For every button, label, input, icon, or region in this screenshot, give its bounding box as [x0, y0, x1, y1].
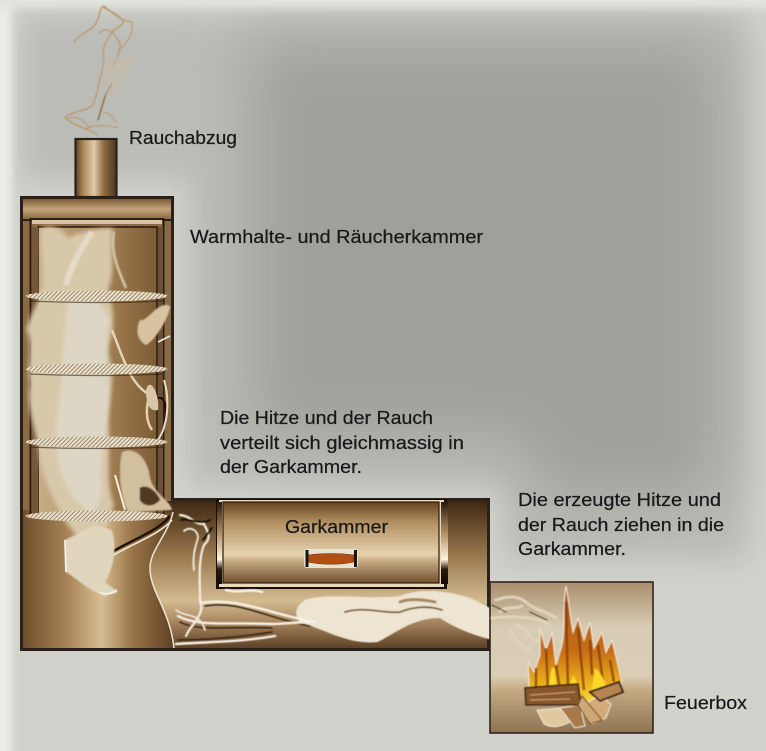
text: heat and smoke distribution: [220, 407, 464, 477]
door handle: [304, 549, 358, 568]
cooking chamber Garkammer: [216, 499, 448, 589]
S-curve wall: [23, 510, 174, 648]
warming chamber frame: [30, 219, 164, 515]
text: generated heat and smoke: [518, 489, 724, 559]
smoke into firebox: [492, 597, 556, 650]
text: generated heat and smoke: Garkammer.: [518, 538, 626, 559]
horizontal flue: [150, 501, 487, 648]
text: heat and smoke distribution: verteilt sich gleichmassig in: [220, 432, 464, 453]
label: Warmhalte- und Räucherkammer: Warmhalte- und Räucherkammer: [190, 226, 483, 247]
text: heat and smoke distribution: Die Hitze und der Rauch: [220, 407, 433, 428]
tower top band: [23, 199, 171, 219]
label: Rauchabzug: Rauchabzug: [129, 127, 237, 148]
tower and flue body: [20, 196, 490, 651]
smoke above chimney: [65, 6, 132, 135]
text: generated heat and smoke: Die erzeugte Hitze und: [518, 489, 721, 510]
label: Garkammer: Garkammer: [285, 516, 388, 537]
tower upper walls: [23, 221, 171, 511]
tower smoke: [26, 226, 172, 596]
text: heat and smoke distribution: der Garkammer.: [220, 456, 362, 477]
label: Feuerbox: Feuerbox: [664, 692, 748, 713]
fire box: [490, 582, 653, 733]
text: generated heat and smoke: der Rauch ziehen in die: [518, 514, 724, 535]
flue smoke: [176, 515, 492, 644]
logs: [525, 682, 623, 728]
chimney: Rauchabzug: [76, 139, 116, 197]
grill racks: [26, 290, 168, 522]
flames: [528, 586, 622, 705]
